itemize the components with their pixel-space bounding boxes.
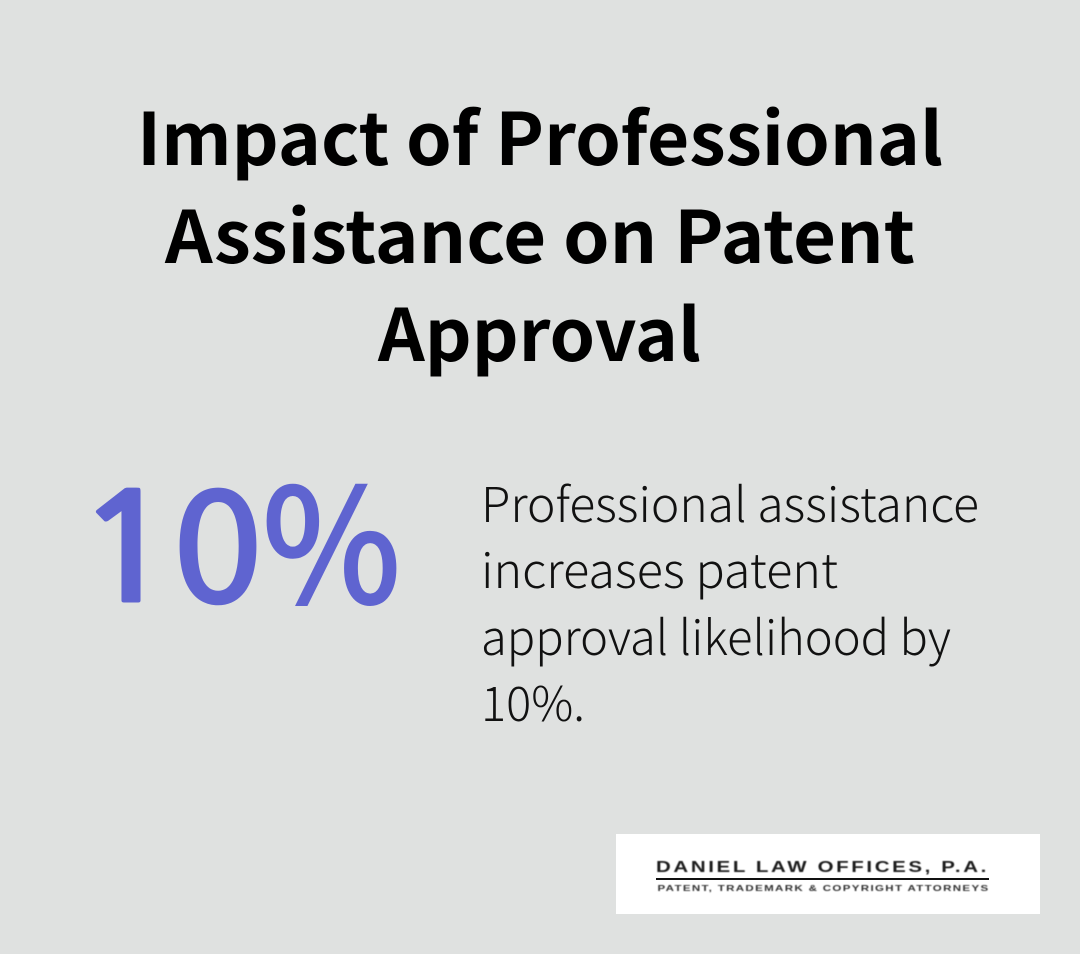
statistic description: [481, 466, 979, 735]
title: [137, 81, 943, 382]
statistic description: 10%.: [481, 665, 585, 735]
title: Impact of Professional: [137, 81, 943, 186]
big statistic: 10%: 0: [172, 420, 264, 649]
logo: Daniel Law Offices: [616, 834, 1040, 914]
logo: Daniel Law Offices: DANIEL LAW OFFICES, P.A.: [656, 859, 989, 876]
statistic description: approval likelihood by: [481, 599, 951, 669]
big statistic: 10%: %: [262, 420, 401, 649]
title: Approval: [377, 277, 701, 382]
logo: Daniel Law Offices: PATENT, TRADEMARK & COPYRIGHT ATTORNEYS: [658, 883, 990, 893]
statistic description: increases patent: [481, 532, 838, 602]
big statistic: 10%: 1: [73, 476, 181, 625]
statistic description: Professional assistance: [481, 466, 979, 536]
title: Assistance on Patent: [164, 179, 915, 284]
big statistic: 10%: [73, 420, 401, 649]
